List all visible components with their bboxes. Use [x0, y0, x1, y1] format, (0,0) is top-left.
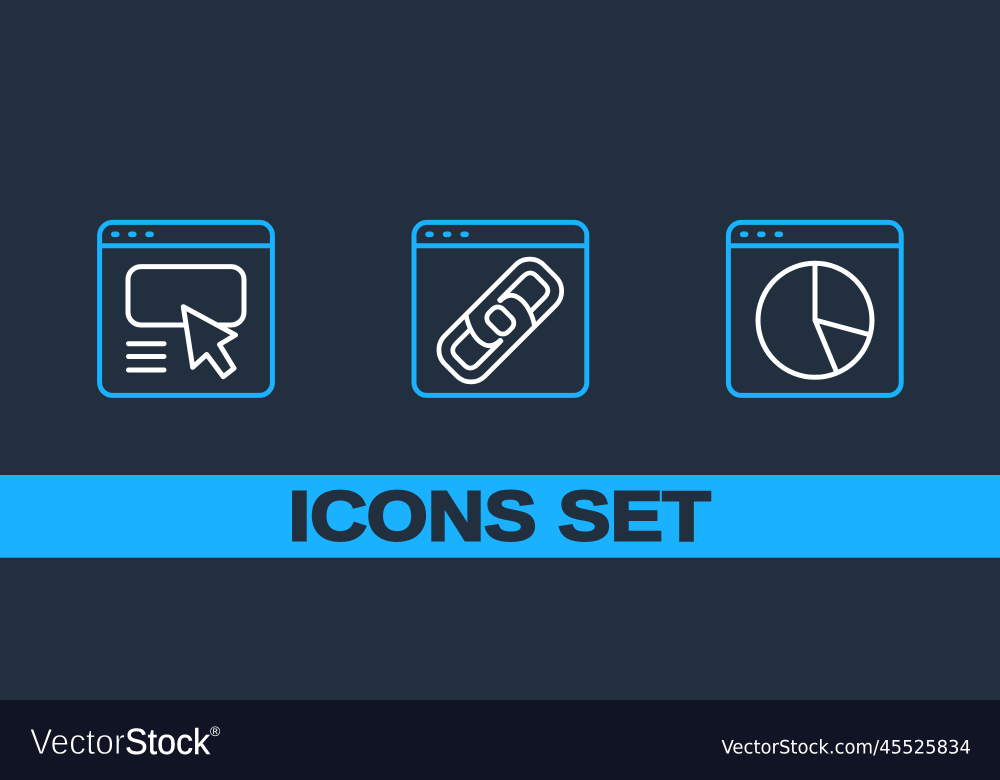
image id: VectorStock.com/45525834: [722, 737, 971, 758]
watermark logo bold part: Stock: [125, 721, 211, 762]
browser frame: [100, 222, 272, 395]
icon: browser window with chain link: [414, 222, 587, 395]
icon: browser window with button and cursor: [100, 222, 272, 395]
cursor arrow: [183, 307, 236, 377]
watermark logo: Vector: [30, 721, 125, 762]
browser frame: [414, 222, 587, 395]
title banner: [0, 475, 1000, 558]
pie chart: [758, 263, 872, 377]
registered mark: ®: [210, 723, 221, 739]
title text: ICONS SET: [288, 477, 710, 555]
text lines: [128, 344, 164, 370]
button outline: [128, 267, 244, 325]
window dots: [111, 232, 154, 237]
icon: browser window with pie chart: [728, 222, 901, 395]
footer bar: [0, 700, 1000, 780]
browser frame: [728, 222, 901, 395]
chain link: [431, 251, 570, 390]
window dots: [425, 232, 469, 237]
window dots: [740, 232, 783, 237]
